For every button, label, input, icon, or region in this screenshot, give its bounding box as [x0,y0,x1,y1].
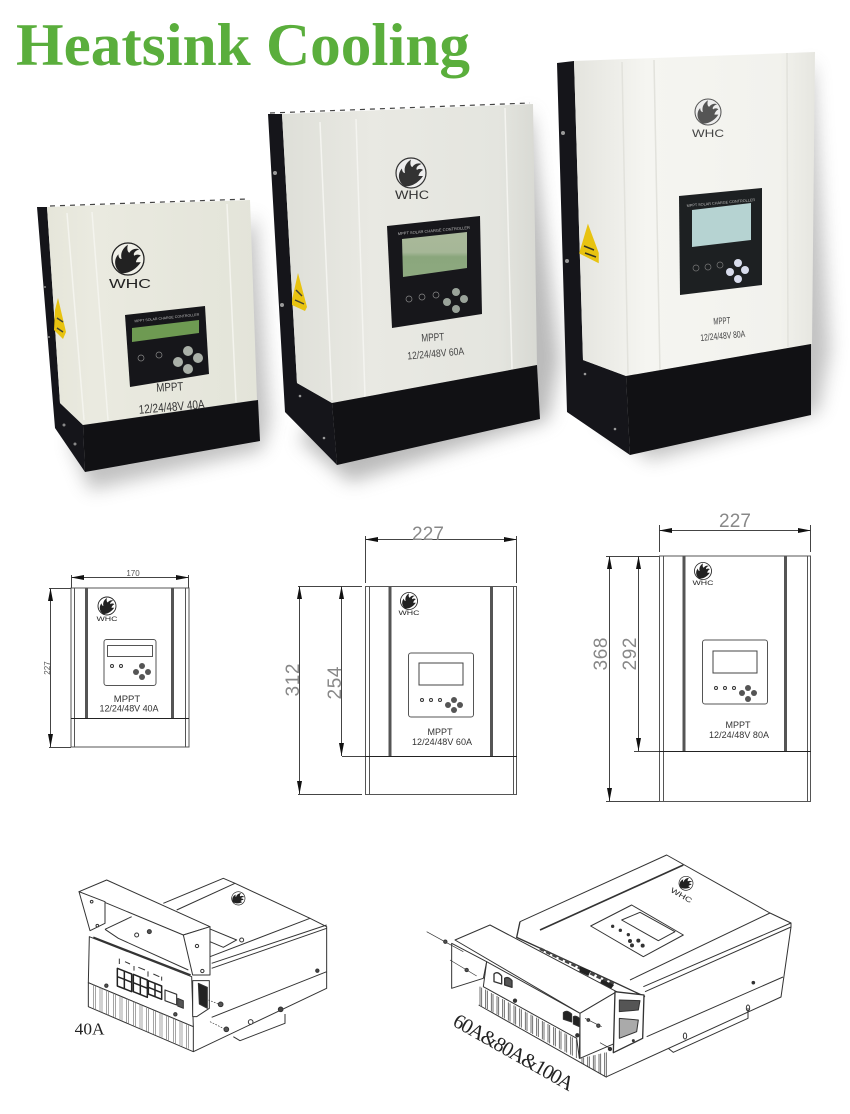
cover front [483,962,580,1058]
overall height dimension [298,586,362,794]
panel outline [408,653,474,717]
white case [574,52,815,376]
lcd outline [622,912,675,941]
label 40A: 40A [75,1019,105,1038]
width dimension [365,536,517,583]
panel outline [104,640,156,686]
left black bracket [37,207,85,472]
screws [561,131,616,430]
height arrows [48,588,53,747]
foot screws [248,969,319,1024]
case ribs [622,53,788,374]
white case [282,104,537,403]
panel caption: MPPT SOLAR CHARGE CONTROLLER [134,313,200,323]
connector band [540,949,615,985]
width arrows [365,537,517,542]
indicators [693,262,723,271]
model text: MPPT [421,331,445,345]
dimension drawing: 40A [43,569,189,748]
screw guides [427,932,610,1048]
width arrows [71,575,189,580]
mounting foot [668,1008,748,1052]
outline [365,586,517,794]
panel caption: MPPT SOLAR CHARGE CONTROLLER [687,198,756,208]
width label: 227 [719,511,751,532]
model text: MPPT [427,727,453,737]
case height dimension [342,586,365,756]
heat fins [480,987,606,1077]
rear inner edge [517,922,645,997]
logo [695,99,721,125]
fin lines [93,985,189,1049]
brand text: WHC [395,188,429,202]
overall height label: 312 [283,664,304,696]
side strips [390,586,492,756]
bracket right wing [183,927,210,975]
indicators and buttons [110,663,151,680]
rating text: 12/24/48V 60A [407,346,465,362]
display panel [125,306,209,387]
indicators [138,352,162,361]
rating text: 12/24/48V 80A [709,730,769,740]
black base [626,344,811,455]
lcd outline [108,646,152,656]
left black bracket [268,114,337,465]
case logo [229,889,247,907]
model text: MPPT [713,316,731,327]
panel caption: MPPT SOLAR CHARGE CONTROLLER [398,225,470,236]
outline [71,588,189,747]
lcd outline [419,663,463,685]
side terminals [613,992,644,1053]
assembly drawing: 60A, 80A and 100A [427,855,791,1096]
logo [694,562,712,580]
case body [163,878,327,1052]
buttons [726,259,749,283]
fin bottom edge [479,1005,607,1077]
model text: MPPT [114,694,140,705]
width dimension [659,525,811,552]
case height label: 292 [620,638,641,670]
rating text: 12/24/48V 60A [412,737,472,747]
side terminal detail [619,1000,640,1038]
overall height arrows [607,556,612,801]
top rail [540,865,683,930]
foot holes [683,1005,750,1039]
terminal blocks [117,968,162,999]
case corner and sides [607,913,791,1077]
brand text: WHC [96,617,118,623]
display panel [679,188,762,295]
rating text: 12/24/48V 40A [100,704,158,714]
panel outline [702,640,768,704]
case height arrows [339,586,344,756]
photo: 40A controller [37,199,270,490]
label 60A&80A&100A: 60A&80A&100A [449,1010,578,1096]
side strips [684,556,786,751]
terminal clusters [579,967,614,989]
width arrows [659,528,811,533]
model text: MPPT [156,379,184,395]
height dimension [49,588,71,748]
small port [178,998,183,1008]
overall height dimension [606,556,659,802]
panel rail [93,937,191,975]
side terminal fill [198,983,207,1008]
top vents [270,103,530,113]
rating text: 12/24/48V 40A [138,397,206,417]
overall height arrows [297,586,302,794]
case ribs [320,108,512,400]
brand text: WHC [692,581,714,587]
front panel [88,937,193,1027]
top vents [50,199,248,206]
inner plate [105,917,188,970]
logo [112,243,144,275]
label mark [584,246,596,257]
buttons [443,288,468,313]
lcd outline [713,651,757,673]
display cut-out [208,928,237,947]
exploded screws [444,940,600,1027]
buttons [173,346,203,374]
warning label [292,273,307,311]
white case [47,200,257,425]
case height dimension [634,556,659,752]
photo: 80A controller [557,52,830,460]
case screw [752,981,755,984]
assembly drawing: 40A [75,878,327,1052]
cover left wing [452,943,487,988]
width label: 170 [126,569,140,578]
black base [83,400,260,472]
rating text: 12/24/48V 80A [700,329,746,344]
network port [165,990,177,1005]
screw guides [208,1000,224,1029]
lcd screen [402,232,467,277]
brand text: WHC [398,611,420,617]
cover top [455,925,617,1013]
shadow [70,215,270,490]
case height label: 254 [325,666,346,700]
height label: 227 [43,661,52,675]
side terminal [193,981,209,1017]
case height arrows [636,556,641,751]
lcd screen [692,203,751,247]
cover ports [494,973,579,1027]
side screws [105,984,229,1032]
width dimension [71,575,189,588]
shadow [600,60,830,460]
black base [332,365,540,465]
bracket top [79,880,210,935]
logo [98,597,116,615]
mounting foot [233,1014,285,1041]
inner screws [135,930,244,942]
model text: MPPT [725,720,751,730]
terminal marks [119,959,162,981]
logo [400,592,418,610]
lcd screen [132,320,199,342]
title: Heatsink Cooling [16,12,470,78]
screws [273,171,325,439]
side strips [86,588,172,718]
left black bracket [557,61,630,455]
case logo [676,874,696,893]
warning label [580,226,598,262]
brand text: WHC [109,276,151,291]
outline [659,556,811,802]
shadow [300,110,560,482]
bracket left wing [79,892,105,931]
photo: 60A controller [268,103,560,482]
overall height label: 368 [591,638,612,670]
display panel [387,216,482,328]
panel buttons [611,925,645,948]
bracket holes [90,900,204,973]
display panel [591,905,683,957]
indicators and buttons [714,685,757,702]
cover screws [513,999,634,1051]
indicators and buttons [420,697,463,713]
brand text: WHC [692,128,724,140]
screws [44,286,76,446]
dimension drawing: 60A [283,524,517,794]
logo [396,158,426,188]
label mark [57,318,63,332]
case ribs [67,204,236,420]
heat fins [88,983,193,1052]
width label: 227 [412,524,444,545]
dimension drawing: 80A [591,511,811,802]
cover right wing [580,992,617,1058]
case brand text: WHC [669,886,695,906]
warning label [54,298,66,339]
case top [520,855,770,980]
indicators [406,292,439,302]
label mark [295,290,304,304]
